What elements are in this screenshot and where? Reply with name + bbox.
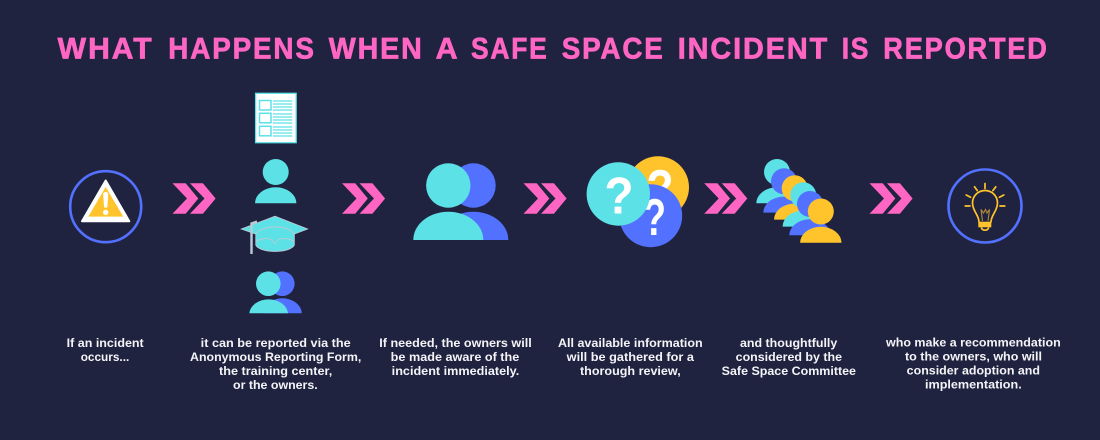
title: HAPPENS xyxy=(168,32,316,66)
text: step 6: who make a recommendation xyxy=(885,336,1061,350)
text: step 3: be made aware of the xyxy=(391,350,520,364)
text: step 2: it can be reported via the xyxy=(201,336,351,350)
text: step 4: thorough review, xyxy=(580,364,681,378)
title: INCIDENT xyxy=(678,32,829,66)
icon: question mark bubbles: ? xyxy=(604,166,634,225)
title: A xyxy=(436,32,460,66)
text: step 6 xyxy=(885,336,1061,392)
arrow: chevrons 4 xyxy=(704,183,747,214)
text: step 3 xyxy=(379,336,532,378)
icon: committee group of people xyxy=(756,159,842,243)
arrow: chevrons 3 xyxy=(524,183,567,214)
icon: light bulb in circle xyxy=(948,170,1022,242)
text: step 6: to the owners, who will xyxy=(905,350,1042,364)
text: step 1: occurs... xyxy=(81,350,129,364)
icon: question mark bubbles: ? xyxy=(646,160,674,218)
text: step 5: Safe Space Committee xyxy=(722,364,856,378)
text: step 2 xyxy=(190,336,361,392)
icon: warning triangle in circle xyxy=(70,171,141,242)
title: IS xyxy=(842,32,870,66)
text: step 6: implementation. xyxy=(925,378,1022,392)
text: step 1 xyxy=(67,336,144,364)
title: REPORTED xyxy=(883,32,1049,66)
text: step 1: If an incident xyxy=(67,336,144,350)
text: step 4: will be gathered for a xyxy=(566,350,694,364)
icon: question mark bubbles: ? xyxy=(643,188,666,246)
text: step 4 xyxy=(558,336,703,378)
text: step 3: If needed, the owners will xyxy=(379,336,532,350)
title: SAFE xyxy=(471,32,548,66)
icon: two owners large xyxy=(413,163,508,240)
text: step 5: and thoughtfully xyxy=(740,336,838,350)
text: step 2: Anonymous Reporting Form, xyxy=(190,350,361,364)
arrow: chevrons 2 xyxy=(342,183,385,214)
title: WHEN xyxy=(329,32,424,66)
icon: reporting form document xyxy=(256,93,296,143)
text: step 6: consider adoption and xyxy=(907,364,1040,378)
text: step 2: the training center, xyxy=(219,364,332,378)
text: step 5 xyxy=(722,336,856,378)
arrow: chevrons 5 xyxy=(870,183,913,214)
icon: person (training center contact) xyxy=(255,159,296,203)
title: SPACE xyxy=(562,32,665,66)
icon: graduation cap xyxy=(241,216,308,254)
text: step 5: considered by the xyxy=(736,350,842,364)
icon: question mark bubbles xyxy=(587,156,689,247)
icon: two owners small xyxy=(249,271,302,313)
arrow: chevrons 1 xyxy=(172,183,216,214)
text: step 2: or the owners. xyxy=(233,378,318,392)
title: WHAT xyxy=(58,32,154,66)
text: step 3: incident immediately. xyxy=(392,364,519,378)
title xyxy=(58,32,1049,66)
text: step 4: All available information xyxy=(558,336,703,350)
